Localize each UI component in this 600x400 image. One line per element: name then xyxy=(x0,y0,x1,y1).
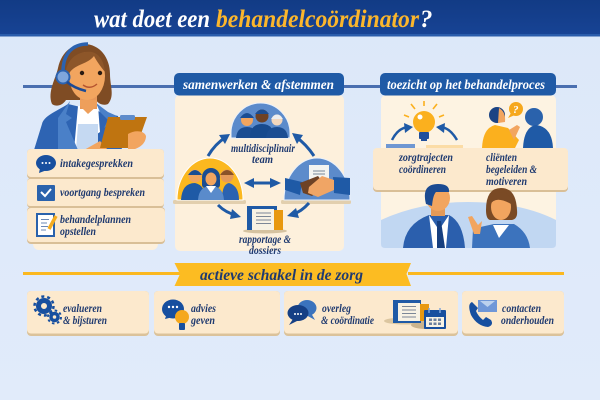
label: clienten: motiveren xyxy=(486,176,527,188)
label: advies xyxy=(191,303,216,315)
label: zorgtrajecten: zorgtrajecten xyxy=(398,152,453,164)
icon: phone and envelope xyxy=(469,300,497,327)
clipboard xyxy=(84,115,147,150)
panel: left task list xyxy=(27,149,165,250)
arrow: handshake to team xyxy=(296,137,314,156)
label: overleg xyxy=(322,303,351,315)
people: male and female colleague xyxy=(403,184,530,248)
dossier label xyxy=(239,234,291,257)
label xyxy=(63,303,107,327)
team label xyxy=(231,143,295,166)
ellipse backdrop xyxy=(381,202,556,248)
label: voortgang bespreken xyxy=(60,187,145,199)
banner: actieve schakel in de zorg: actieve schakel in de zorg xyxy=(200,267,363,284)
label: contacten xyxy=(502,303,541,315)
title question mark: ? xyxy=(420,6,432,33)
arrow: clients to team xyxy=(208,137,226,156)
icon: gears xyxy=(34,296,61,324)
label: & bijsturen xyxy=(63,315,107,327)
icon: dossier xyxy=(243,206,287,234)
illustration: coordinator with headset and clipboard xyxy=(34,44,147,150)
panel heading: samenwerken & afstemmen xyxy=(182,77,334,92)
arrow: clients to dossier xyxy=(218,205,236,215)
icon: two speech bubbles xyxy=(288,300,316,325)
arrow: two-way between domes xyxy=(244,178,281,188)
label: zorgtrajecten xyxy=(398,152,453,176)
dossier label: dossiers xyxy=(249,245,281,257)
card: contacten onderhouden xyxy=(462,291,564,336)
headset xyxy=(56,44,88,91)
card: overleg en coordinatie xyxy=(284,291,458,336)
arrowhead: clients to team xyxy=(219,134,230,144)
card: advies geven xyxy=(154,291,280,336)
card: behandelplannen opstellen: opstellen xyxy=(60,226,96,238)
label: clienten: begeleiden & xyxy=(486,164,537,176)
icon: plan with pencil xyxy=(37,214,56,236)
team label: team xyxy=(252,154,273,166)
band: coordination labels xyxy=(373,148,568,192)
label: behandelplannen xyxy=(60,214,131,226)
panel heading xyxy=(174,73,344,96)
label: evalueren xyxy=(63,303,102,315)
panel: toezicht op het behandelproces xyxy=(373,73,568,248)
client dome xyxy=(173,158,246,204)
handshake dome xyxy=(281,158,351,204)
panel: samenwerken en afstemmen xyxy=(173,73,351,257)
label: clienten xyxy=(486,152,537,188)
title: wat doet een xyxy=(94,6,210,33)
icon: checkbox xyxy=(37,185,55,201)
icon: document and calendar xyxy=(384,300,446,329)
title highlight: behandelcoördinator xyxy=(216,6,419,33)
label: zorgtrajecten: coördineren xyxy=(399,164,446,176)
label: geven xyxy=(190,315,215,327)
connector line bottom xyxy=(23,272,564,275)
banner: actieve schakel in de zorg xyxy=(174,263,411,286)
arrowhead: handshake to dossier xyxy=(287,208,299,218)
icon: conversation with question: ? xyxy=(513,104,519,116)
icon: speech bubble xyxy=(36,155,56,173)
label: onderhouden xyxy=(501,315,554,327)
label: intakegesprekken xyxy=(60,158,133,170)
team label: multidisciplinair xyxy=(231,143,295,155)
header band xyxy=(0,0,600,36)
label xyxy=(321,303,374,327)
label xyxy=(501,303,554,327)
panel heading: toezicht op het behandelproces xyxy=(387,77,545,92)
label xyxy=(190,303,216,327)
icon: light bulb with arrows xyxy=(386,101,463,149)
icon: conversation with question xyxy=(482,102,553,148)
icon: speech bubble with bulb xyxy=(162,300,189,330)
panel heading xyxy=(380,73,556,96)
card: evalueren en bijsturen xyxy=(27,291,149,336)
arrow: handshake to dossier xyxy=(293,203,309,214)
label: & coördinatie xyxy=(321,315,374,327)
label: clienten: cliënten xyxy=(486,152,517,164)
arrowhead: handshake to team xyxy=(292,133,303,144)
card: behandelplannen opstellen xyxy=(27,207,165,244)
team dome xyxy=(231,103,290,138)
arrowhead: clients to dossier xyxy=(230,209,241,219)
dossier label: rapportage & xyxy=(239,234,291,246)
connector line top xyxy=(23,85,577,88)
